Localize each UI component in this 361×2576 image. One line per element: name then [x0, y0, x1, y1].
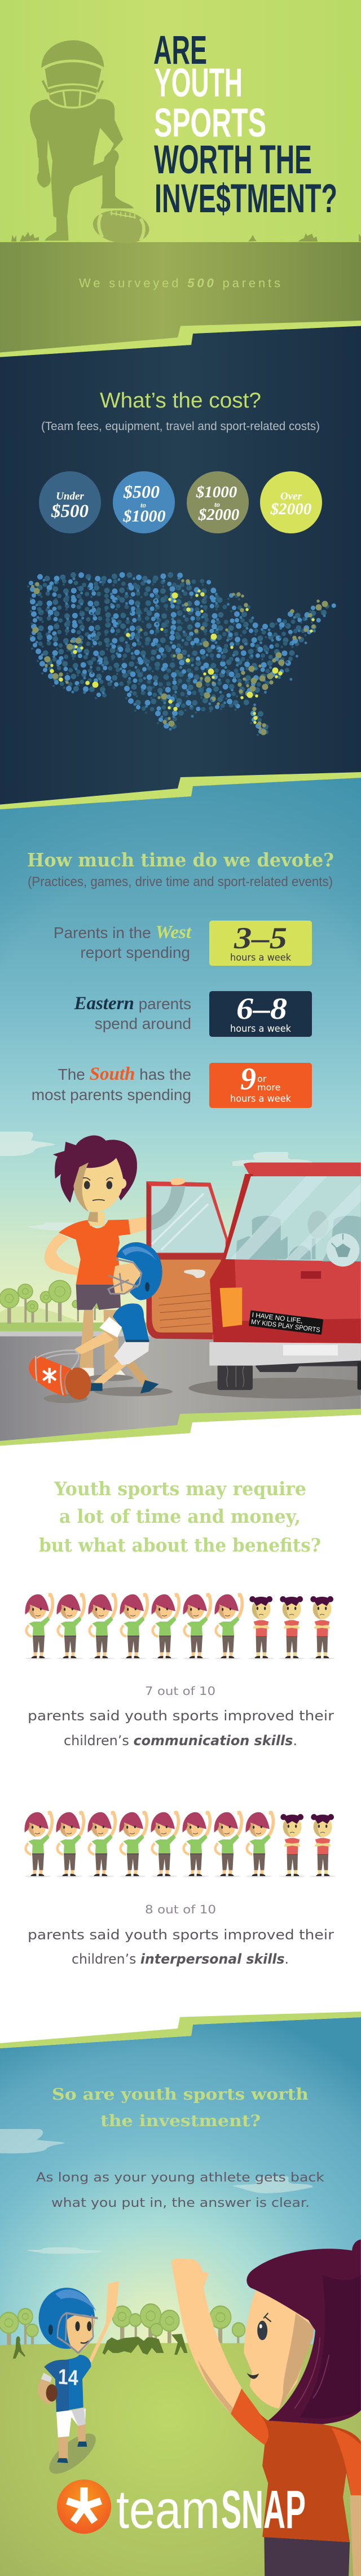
title: YOUTH — [155, 61, 243, 106]
badge: 3-5 hours: 3–5 — [234, 921, 287, 955]
text: 8 out of 10: parents said youth sports improved their — [28, 1927, 334, 1943]
panel: cost — [0, 321, 361, 818]
car body — [189, 1163, 361, 1399]
text: 7 out of 10: children’s communication skills. — [64, 1733, 297, 1749]
title: ARE — [153, 28, 207, 73]
heading: worth it — [52, 2085, 309, 2130]
legend: under 500: $500 — [51, 501, 89, 522]
text: 7 out of 10 — [28, 1684, 334, 1749]
football — [91, 207, 151, 247]
road — [0, 1331, 361, 1447]
ground — [0, 232, 361, 395]
bumper sticker — [249, 1310, 323, 1335]
sports bag — [29, 1350, 94, 1403]
legend: 1000 to 2000: $2000 — [198, 506, 239, 524]
legend: 500 to 1000: $1000 — [123, 507, 166, 525]
text: answer: what you put in, the answer is clear. — [51, 2196, 310, 2210]
field — [0, 2343, 361, 2576]
row: east text: spend around — [95, 1015, 191, 1032]
pictogram: 8 of 10 kids — [25, 1811, 336, 1877]
heading: benefits: a lot of time and money, — [59, 1505, 301, 1527]
heading: benefits: Youth sports may require — [54, 1478, 306, 1500]
child in helmet — [75, 1242, 173, 1396]
badge: 9 or more hours: 9 — [240, 1062, 256, 1097]
title — [153, 28, 337, 221]
legend: under 500: Under — [56, 490, 84, 502]
row: south text — [32, 1064, 191, 1103]
football player silhouette — [30, 40, 134, 240]
bumper sticker: I HAVE NO LIFE, — [252, 1311, 303, 1325]
badge: 3-5 hours: hours a week — [230, 952, 291, 963]
badge: 6-8 hours: 6–8 — [236, 992, 287, 1026]
text: answer — [36, 2171, 324, 2210]
legend: under 500 — [39, 471, 101, 533]
panel: conclusion — [0, 2012, 361, 2576]
panel: hero — [0, 0, 361, 395]
text: 7 out of 10: parents said youth sports improved their — [28, 1708, 334, 1724]
row: west text: report spending — [80, 944, 190, 961]
badge: 6-8 hours — [209, 991, 312, 1037]
badge: 9 or more hours: more — [257, 1082, 280, 1093]
heading: how much time: How much time do we devote? — [27, 849, 334, 871]
logo: teamsnap — [57, 2479, 306, 2540]
panel: time — [0, 772, 361, 1467]
car door — [146, 1178, 228, 1339]
legend: over 2000: Over — [280, 490, 302, 502]
panel: benefits — [0, 1409, 361, 2054]
dot map of the United States — [28, 575, 334, 735]
clouds — [0, 2129, 313, 2254]
illustration: parent and child at car — [0, 1136, 361, 1447]
row: west text — [54, 922, 192, 961]
heading: worth it: the investment? — [100, 2111, 261, 2130]
bumper sticker: MY KIDS PLAY SPORTS — [250, 1317, 321, 1334]
legend: 1000 to 2000: to — [214, 500, 221, 509]
legend: over 2000: $2000 — [270, 500, 311, 518]
row: east text — [73, 993, 191, 1032]
row: east text: Eastern parents — [73, 993, 191, 1014]
title: SPORTS — [154, 101, 266, 146]
subheading: cost items: (Team fees, equipment, travel and sport-related costs) — [41, 420, 320, 433]
legend: 500 to 1000: to — [140, 501, 147, 509]
boy quarterback — [38, 2281, 119, 2482]
survey note: We surveyed 500 parents — [79, 276, 280, 290]
text: 8 out of 10: 8 out of 10 — [145, 1903, 216, 1916]
heading: worth it: So are youth sports worth — [52, 2085, 309, 2104]
legend: 1000 to 2000: $1000 — [196, 483, 237, 501]
mother — [45, 1136, 147, 1381]
text: 8 out of 10 — [28, 1903, 334, 1967]
trees on horizon — [0, 2304, 245, 2348]
text: 7 out of 10: 7 out of 10 — [145, 1684, 215, 1698]
clouds — [0, 1132, 313, 1230]
legend: 500 to 1000 — [113, 471, 175, 533]
legend: 500 to 1000: $500 — [123, 481, 160, 502]
row: south text: most parents spending — [32, 1086, 191, 1103]
badge: 9 or more hours — [209, 1062, 312, 1108]
distant players — [13, 2334, 188, 2359]
boy quarterback: 14 — [58, 2364, 79, 2390]
heading: benefits: but what about the benefits? — [39, 1534, 321, 1556]
text: 8 out of 10: children’s interpersonal skills. — [72, 1951, 289, 1967]
legend: over 2000 — [260, 471, 322, 533]
badge: 9 or more hours: hours a week — [230, 1093, 291, 1105]
logo: teamsnap: team — [116, 2479, 220, 2540]
background trees and hills — [0, 1280, 147, 1333]
subheading: time items: (Practices, games, drive time and sport-related events) — [28, 874, 333, 890]
row: south text: The South has the — [58, 1064, 191, 1084]
text: answer: As long as your young athlete gets back — [36, 2171, 324, 2185]
heading: what's the cost: What’s the cost? — [100, 389, 261, 413]
badge: 6-8 hours: hours a week — [230, 1023, 291, 1035]
row: west text: Parents in the West — [54, 922, 192, 943]
mother waving — [171, 2240, 361, 2576]
badge: 3-5 hours — [209, 921, 312, 966]
badge: 9 or more hours: or — [257, 1074, 267, 1084]
heading: benefits — [39, 1478, 321, 1556]
legend: 1000 to 2000 — [187, 471, 249, 533]
pictogram: 7 of 10 kids — [25, 1593, 335, 1659]
